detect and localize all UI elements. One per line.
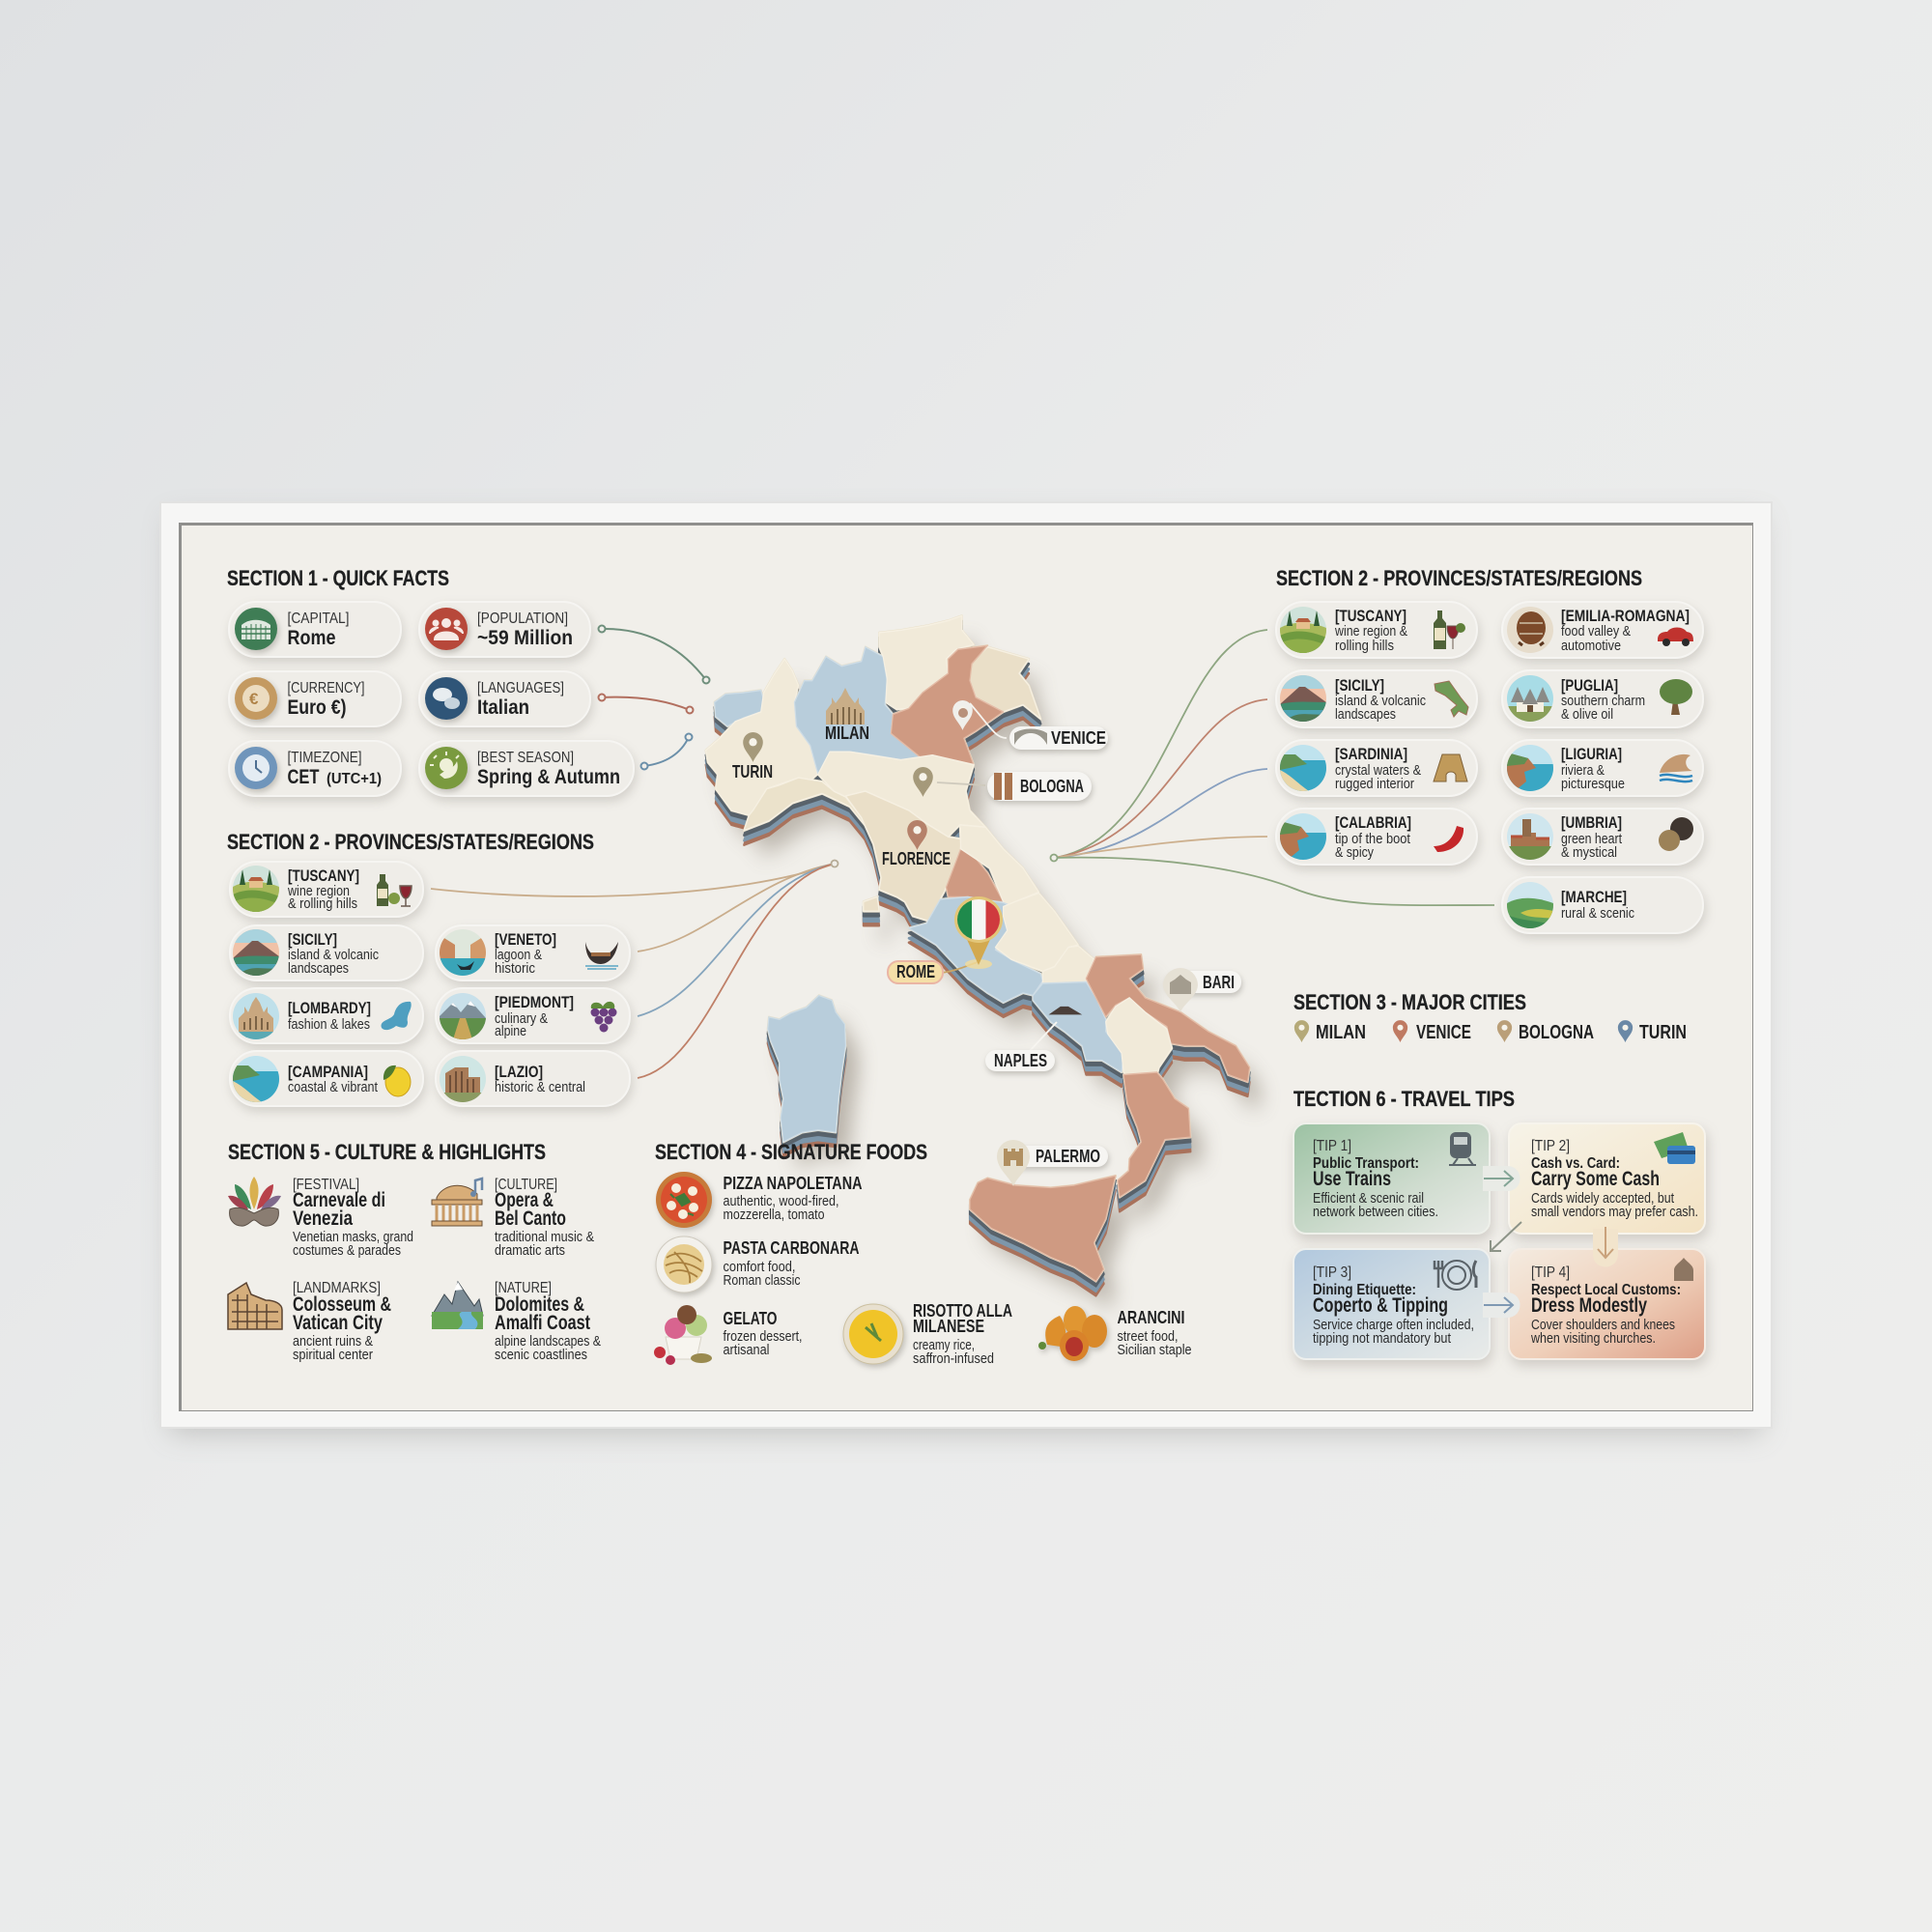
tip 2 <box>1509 1123 1705 1234</box>
picture frame <box>160 502 1772 1435</box>
food: risotto <box>843 1301 1012 1367</box>
region: Umbria: green heart <box>1561 832 1622 847</box>
food: carbonara: PASTA CARBONARA <box>723 1238 860 1258</box>
region: Sardinia: rugged interior <box>1335 777 1414 792</box>
icon: mountains and river <box>432 1282 483 1329</box>
culture: opera: [CULTURE] <box>495 1177 557 1193</box>
icon: red car <box>1658 628 1693 646</box>
region: Emilia-Romagna: automotive <box>1561 639 1621 654</box>
icon: gondola <box>585 942 618 969</box>
heading: section 2 left: SECTION 2 - PROVINCES/STATES/REGIONS <box>227 830 594 854</box>
region: Tuscany <box>230 862 423 917</box>
fact: currency: Euro €) <box>288 696 346 719</box>
region: Sicily: [SICILY] <box>288 930 337 949</box>
food: carbonara: comfort food, <box>723 1259 796 1275</box>
culture: nature: [NATURE] <box>495 1280 552 1296</box>
icon: opera house <box>432 1179 482 1226</box>
region: Piedmont: culinary & <box>495 1011 548 1027</box>
region: Piedmont <box>436 988 630 1043</box>
fact: best season: [BEST SEASON] <box>477 750 574 766</box>
map label: Florence: FLORENCE <box>882 849 951 868</box>
heading: section 5: SECTION 5 - CULTURE & HIGHLIGHTS <box>228 1140 546 1164</box>
region: Marche: [MARCHE] <box>1561 888 1627 906</box>
heading: section 2 right: SECTION 2 - PROVINCES/STATES/REGIONS <box>1276 566 1642 590</box>
culture: landmarks: [LANDMARKS] <box>293 1280 381 1296</box>
region: Sicily <box>1276 670 1477 727</box>
fact: best season: Spring & Autumn <box>477 766 620 788</box>
legend: major cities: VENICE <box>1416 1022 1471 1043</box>
tip 1: network between cities. <box>1313 1204 1438 1220</box>
region: Calabria: & spicy <box>1335 845 1375 861</box>
culture: landmarks: spiritual center <box>293 1347 373 1363</box>
arrow: tip 2 to tip 3 <box>1491 1222 1521 1251</box>
culture: nature: Amalfi Coast <box>495 1312 590 1334</box>
region: Piedmont: [PIEDMONT] <box>495 993 574 1011</box>
culture: nature <box>432 1280 601 1363</box>
culture: festival <box>228 1177 413 1259</box>
region: Sardinia <box>1276 740 1477 796</box>
map label: Bologna <box>913 767 1092 801</box>
region: Veneto: historic <box>495 961 535 977</box>
fact: languages <box>419 671 590 726</box>
region: Puglia: southern charm <box>1561 694 1645 709</box>
region: Marche: rural & scenic <box>1561 906 1634 922</box>
region: Veneto <box>436 925 630 980</box>
region: Lombardy: fashion & lakes <box>288 1017 370 1033</box>
map label: Venice <box>952 700 1108 750</box>
region: Marche <box>1502 877 1703 933</box>
map label: Naples <box>985 1022 1057 1071</box>
panel: quick facts <box>229 602 634 796</box>
culture: festival: Venezia <box>293 1208 353 1230</box>
tip 2: Cards widely accepted, but <box>1531 1190 1675 1207</box>
culture: opera: Opera & <box>495 1189 554 1211</box>
icon: church <box>1674 1258 1693 1281</box>
map label: Palermo <box>997 1140 1108 1186</box>
icon: wave <box>1660 754 1692 781</box>
tip 3: [TIP 3] <box>1313 1264 1351 1281</box>
icon: gelato <box>654 1305 712 1365</box>
fact: timezone: [TIMEZONE] <box>288 750 361 766</box>
map label: Bologna: BOLOGNA <box>1020 777 1084 796</box>
tip 1: Efficient & scenic rail <box>1313 1190 1424 1207</box>
arrow: tip 2 to tip 4 <box>1593 1227 1618 1267</box>
map label: Bari: BARI <box>1203 973 1235 992</box>
region: Emilia-Romagna: [EMILIA-ROMAGNA] <box>1561 607 1690 625</box>
map label: Naples: NAPLES <box>994 1051 1047 1070</box>
region: Umbria: & mystical <box>1561 845 1617 861</box>
region: Lombardy <box>230 988 423 1043</box>
fact: population <box>419 602 590 657</box>
fact: currency: [CURRENCY] <box>288 680 365 696</box>
region: Calabria: tip of the boot <box>1335 832 1410 847</box>
map pin: Rome flag <box>954 896 1003 969</box>
food: pizza: mozzerella, tomato <box>723 1207 825 1223</box>
culture: landmarks <box>228 1280 391 1363</box>
map label: Milan <box>825 688 869 743</box>
icon: carnival mask <box>228 1177 281 1226</box>
region: Tuscany: & rolling hills <box>288 896 357 912</box>
icon: Italy boot <box>1435 681 1468 717</box>
map label: Turin: TURIN <box>732 762 773 781</box>
icon: pizza <box>656 1172 712 1228</box>
region: Sicily: island & volcanic <box>1335 694 1426 709</box>
region: Puglia: & olive oil <box>1561 707 1613 723</box>
region: Tuscany: [TUSCANY] <box>288 867 359 885</box>
culture: festival: costumes & parades <box>293 1242 401 1259</box>
fact: languages: [LANGUAGES] <box>477 680 564 696</box>
icon: cash and card <box>1654 1132 1695 1164</box>
region: Veneto: lagoon & <box>495 948 542 963</box>
region: Lombardy: [LOMBARDY] <box>288 999 371 1017</box>
culture: festival: [FESTIVAL] <box>293 1177 359 1193</box>
culture: landmarks: Colosseum & <box>293 1293 391 1316</box>
region: Sicily: island & volcanic <box>288 948 379 963</box>
heading: section 6: TECTION 6 - TRAVEL TIPS <box>1293 1087 1515 1111</box>
region: Campania: coastal & vibrant <box>288 1080 378 1095</box>
tip 1: Use Trains <box>1313 1168 1391 1190</box>
legend: major cities: BOLOGNA <box>1519 1022 1594 1043</box>
fact: currency <box>229 671 401 726</box>
icon: chili <box>1434 826 1463 852</box>
tip 3 <box>1293 1249 1490 1359</box>
icon: Milan cathedral <box>826 688 865 724</box>
icon: wine <box>1434 611 1465 649</box>
tip 1: [TIP 1] <box>1313 1138 1351 1154</box>
tip 1: Public Transport: <box>1313 1155 1419 1172</box>
region: Campania <box>230 1051 423 1106</box>
connectors: left regions to map <box>431 860 838 1078</box>
region: Umbria <box>1502 809 1703 865</box>
region: Tuscany <box>1276 602 1477 658</box>
food: gelato: frozen dessert, <box>723 1328 802 1345</box>
culture: landmarks: Vatican City <box>293 1312 383 1334</box>
icon: Palermo castle <box>1004 1149 1023 1166</box>
arrow: tip 3 to tip 4 <box>1483 1293 1520 1318</box>
fact: capital <box>229 602 401 657</box>
region: Liguria: picturesque <box>1561 777 1625 792</box>
map label: Milan: MILAN <box>825 724 869 743</box>
tip 2: [TIP 2] <box>1531 1138 1570 1154</box>
fact: best season <box>419 741 634 796</box>
region: Sardinia: crystal waters & <box>1335 763 1421 779</box>
region: Sicily <box>230 925 423 980</box>
map label: Venice: VENICE <box>1051 728 1106 748</box>
culture: nature: alpine landscapes & <box>495 1333 601 1350</box>
region: Lazio <box>436 1051 630 1106</box>
tip 4 <box>1509 1249 1705 1359</box>
icon: barrel <box>1517 611 1546 645</box>
region: Sicily: [SICILY] <box>1335 676 1384 695</box>
panel: regions right <box>1276 602 1703 933</box>
food: arancini: Sicilian staple <box>1117 1342 1192 1358</box>
map label: Florence <box>882 820 951 868</box>
region: Tuscany: wine region <box>287 884 350 899</box>
icon: arancini <box>1038 1306 1107 1361</box>
heading: section 4: SECTION 4 - SIGNATURE FOODS <box>655 1140 927 1164</box>
icon: nuraghe <box>1434 754 1467 781</box>
fact: currency: € <box>249 690 259 708</box>
region: Lazio: historic & central <box>495 1080 585 1095</box>
connectors: quick facts to map <box>599 626 709 769</box>
food: arancini: ARANCINI <box>1117 1308 1184 1327</box>
map label: Palermo: PALERMO <box>1036 1147 1100 1166</box>
region: Campania: [CAMPANIA] <box>288 1063 368 1081</box>
tip 2: Carry Some Cash <box>1531 1168 1660 1190</box>
fact: timezone <box>229 741 401 796</box>
region: Emilia-Romagna <box>1502 602 1703 658</box>
tip 4: Dress Modestly <box>1531 1294 1647 1317</box>
region: Sardinia: [SARDINIA] <box>1335 745 1407 763</box>
fact: timezone: (UTC+1) <box>327 771 382 787</box>
tip 4: when visiting churches. <box>1530 1330 1656 1347</box>
fact: capital: [CAPITAL] <box>288 611 350 627</box>
culture: opera <box>432 1177 594 1259</box>
fact: timezone: CET <box>288 766 320 788</box>
region: Calabria <box>1276 809 1477 865</box>
arrow: tip 1 to tip 2 <box>1483 1166 1520 1191</box>
region: Liguria: riviera & <box>1561 763 1605 779</box>
tip 3: tipping not mandatory but <box>1313 1330 1452 1347</box>
food: risotto: saffron-infused <box>913 1350 994 1367</box>
food: carbonara: Roman classic <box>723 1272 801 1289</box>
culture: opera: traditional music & <box>495 1229 594 1245</box>
tip 2: Cash vs. Card: <box>1531 1155 1620 1172</box>
heading: section 3: SECTION 3 - MAJOR CITIES <box>1293 990 1526 1014</box>
map of Italy <box>706 615 1264 1306</box>
icon: Vesuvius <box>1049 1007 1082 1014</box>
food: gelato <box>654 1305 802 1365</box>
icon: Bari basilica <box>1170 975 1191 994</box>
connectors: right regions to map <box>1051 630 1494 905</box>
food: arancini: street food, <box>1117 1328 1179 1345</box>
fact: population: ~59 Million <box>477 627 573 649</box>
food: gelato: GELATO <box>723 1309 777 1328</box>
regions <box>706 615 1250 1281</box>
tip 2: small vendors may prefer cash. <box>1531 1204 1698 1220</box>
region: Tuscany: wine region & <box>1334 624 1407 639</box>
tip 4: [TIP 4] <box>1531 1264 1570 1281</box>
map label: Rome <box>888 961 943 983</box>
food: risotto: creamy rice, <box>913 1337 975 1353</box>
icon: olive tree <box>1660 679 1692 715</box>
region: Emilia-Romagna: food valley & <box>1561 624 1631 639</box>
food: risotto: MILANESE <box>913 1317 984 1336</box>
map label: Rome: ROME <box>896 962 935 981</box>
culture: opera: dramatic arts <box>495 1242 565 1259</box>
icon: train <box>1449 1132 1476 1165</box>
region: Umbria: [UMBRIA] <box>1561 813 1622 832</box>
culture: festival: Carnevale di <box>293 1189 385 1211</box>
food: pizza <box>656 1172 862 1228</box>
icon: lemon <box>384 1065 411 1096</box>
tip 4: Cover shoulders and knees <box>1531 1317 1675 1333</box>
region: Calabria: [CALABRIA] <box>1335 813 1411 832</box>
region: Sicily: landscapes <box>1335 707 1396 723</box>
icon: Rialto bridge <box>1014 728 1047 745</box>
culture: landmarks: ancient ruins & <box>293 1333 373 1350</box>
region: Puglia: [PUGLIA] <box>1561 676 1618 695</box>
region: Liguria <box>1502 740 1703 796</box>
map leader lines <box>937 703 1007 973</box>
region: Liguria: [LIGURIA] <box>1561 745 1622 763</box>
panel: culture and highlights <box>228 1177 601 1363</box>
tip 1 <box>1293 1123 1490 1234</box>
food: pizza: authentic, wood-fired, <box>723 1193 838 1209</box>
legend: major cities <box>1294 1020 1687 1043</box>
tip 3: Dining Etiquette: <box>1313 1282 1416 1298</box>
culture: nature: Dolomites & <box>495 1293 584 1316</box>
tip 3: Service charge often included, <box>1313 1317 1474 1333</box>
icon: grapes <box>591 1002 616 1032</box>
map label: Turin <box>732 732 773 781</box>
tip 4: Respect Local Customs: <box>1531 1282 1681 1298</box>
icon: lake <box>382 1002 412 1030</box>
icon: pasta plate <box>656 1236 712 1293</box>
culture: nature: scenic coastlines <box>495 1347 587 1363</box>
food: risotto: RISOTTO ALLA <box>913 1301 1012 1321</box>
legend: major cities: MILAN <box>1316 1022 1366 1043</box>
region: Puglia <box>1502 670 1703 727</box>
icon: plate and cutlery <box>1435 1261 1476 1290</box>
region: Tuscany: rolling hills <box>1335 639 1394 654</box>
region: Lazio: [LAZIO] <box>495 1063 543 1081</box>
region: Veneto: [VENETO] <box>495 930 556 949</box>
map label: Bari <box>1163 968 1241 1012</box>
heading: section 1: SECTION 1 - QUICK FACTS <box>227 566 449 590</box>
icon: risotto <box>843 1304 903 1364</box>
icon: Colosseum <box>228 1283 282 1329</box>
fact: capital: Rome <box>288 627 336 649</box>
region: Piedmont: alpine <box>495 1024 526 1039</box>
food: pizza: PIZZA NAPOLETANA <box>723 1174 862 1193</box>
icon: truffles <box>1659 817 1693 851</box>
icon: wine <box>377 874 412 906</box>
tip 3: Coperto & Tipping <box>1313 1294 1448 1317</box>
panel: travel tips <box>1293 1123 1705 1359</box>
icon: Bologna towers <box>994 773 1012 800</box>
panel: regions left <box>230 862 630 1106</box>
region: Tuscany: [TUSCANY] <box>1335 607 1406 625</box>
fact: population: [POPULATION] <box>477 611 568 627</box>
culture: festival: Venetian masks, grand <box>293 1229 413 1245</box>
food: arancini <box>1038 1306 1192 1361</box>
panel: signature foods <box>654 1172 1192 1367</box>
culture: opera: Bel Canto <box>495 1208 566 1230</box>
food: gelato: artisanal <box>723 1342 769 1358</box>
region: Sicily: landscapes <box>288 961 349 977</box>
food: carbonara <box>656 1236 860 1293</box>
legend: major cities: TURIN <box>1639 1022 1687 1043</box>
fact: languages: Italian <box>477 696 529 719</box>
